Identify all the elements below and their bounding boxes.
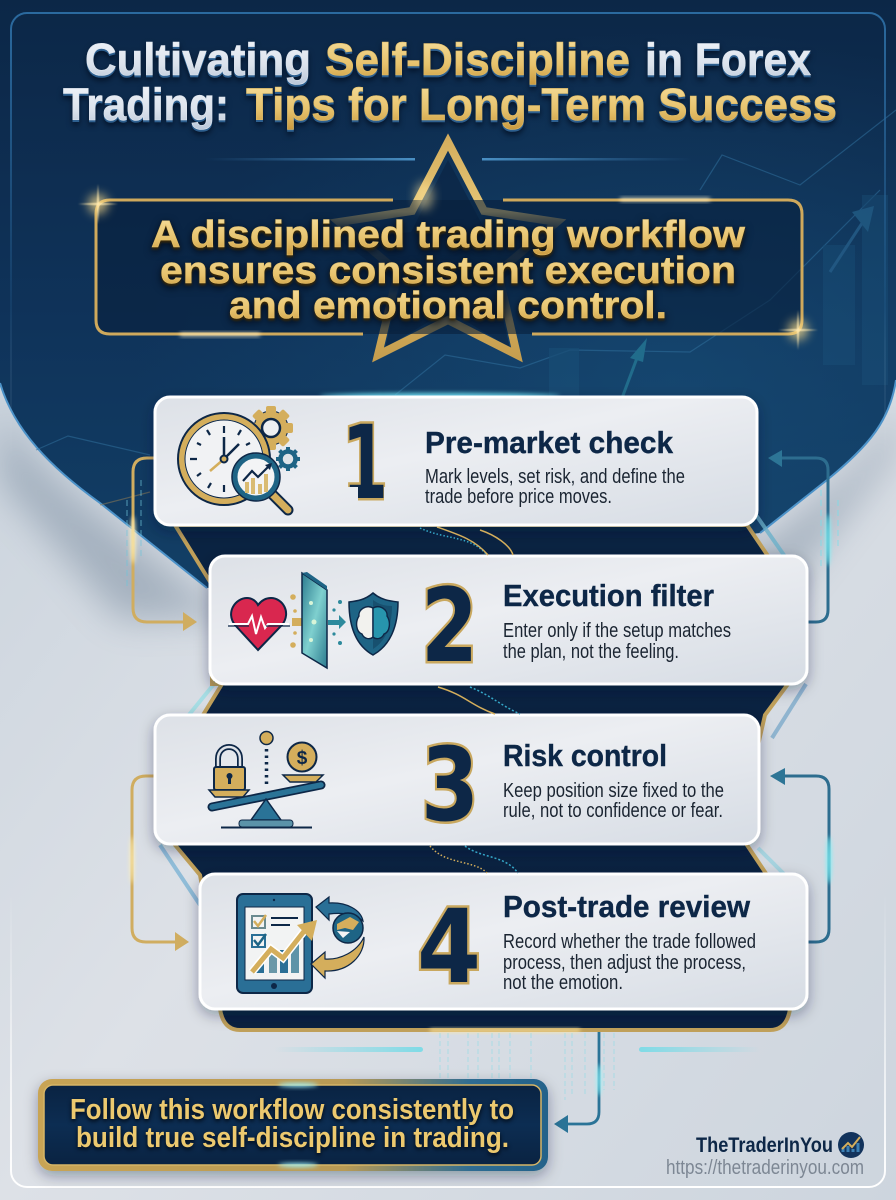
callout: summary box bbox=[38, 1079, 548, 1171]
brand: TheTraderInYou: TheTraderInYou bbox=[696, 1134, 833, 1157]
icon: clock, gears and magnifier bbox=[178, 406, 300, 510]
background market chart bbox=[36, 110, 896, 505]
center hexagonal backdrop bbox=[170, 525, 795, 1030]
heading: execution filter: Execution filter bbox=[503, 578, 714, 613]
star divider lines bbox=[205, 158, 692, 160]
number 3: 3 bbox=[421, 726, 479, 845]
brand: TheTraderInYou bbox=[666, 1132, 864, 1179]
callout: summary box: build true self-discipline in trading. bbox=[76, 1122, 509, 1154]
text: step 2 description: the plan, not the feeling. bbox=[503, 641, 679, 663]
glow under backdrop bbox=[430, 1029, 580, 1032]
title: Self-Discipline bbox=[325, 34, 630, 85]
card 1: pre-market check bbox=[155, 397, 757, 525]
icon: heart, filter and shield bbox=[228, 572, 398, 668]
decorative waves between cards bbox=[420, 527, 520, 873]
arrow: gold loop 3 to 4 bbox=[130, 776, 189, 951]
number 4: 4 bbox=[417, 888, 481, 1007]
text: step 3 description: rule, not to confidence or fear. bbox=[503, 800, 723, 822]
callout: key message box bbox=[78, 182, 818, 350]
light teal diagonal strips bbox=[160, 515, 806, 905]
title: Cultivating bbox=[85, 34, 311, 85]
icon: lock and coin balance bbox=[209, 732, 323, 828]
callout: key message box: ensures consistent execution bbox=[160, 250, 736, 292]
title: in Forex bbox=[645, 34, 811, 85]
callout: key message box: A disciplined trading workflow bbox=[151, 214, 745, 256]
card 3: risk control bbox=[155, 715, 759, 845]
card 4: post-trade review bbox=[200, 874, 807, 1009]
brand: TheTraderInYou: https://thetraderinyou.com bbox=[666, 1157, 864, 1179]
title: Trading: bbox=[63, 79, 229, 130]
callout: key message box: and emotional control. bbox=[229, 285, 667, 327]
data rain bbox=[440, 1033, 614, 1100]
text: step 3 description bbox=[503, 780, 724, 822]
star emblem bbox=[339, 142, 557, 355]
glow above card 1 bbox=[320, 393, 560, 399]
card 2: execution filter bbox=[210, 556, 807, 686]
arrow: gold loop 1 to 2 bbox=[127, 458, 197, 631]
text: step 1 description: trade before price moves. bbox=[425, 486, 612, 508]
text: step 4 description: not the emotion. bbox=[503, 972, 623, 994]
heading: pre-market check: Pre-market check bbox=[425, 425, 674, 460]
arrow: blue loop 2 to 1 bbox=[768, 450, 838, 622]
arrow: blue loop 4 to 3 bbox=[770, 768, 832, 942]
title: Tips for Long-Term Success bbox=[246, 79, 837, 130]
curve shadow bbox=[0, 395, 896, 620]
arrow: down to summary box bbox=[554, 1032, 601, 1133]
cyan light bars bbox=[274, 1047, 760, 1052]
text: step 4 description: process, then adjust the process, bbox=[503, 952, 746, 974]
number 1: 1 bbox=[342, 404, 388, 523]
heading: post-trade review: Post-trade review bbox=[503, 889, 751, 924]
icon: brand logo bbox=[838, 1132, 864, 1158]
number 2: 2 bbox=[421, 567, 478, 686]
callout: summary box: Follow this workflow consistently to bbox=[70, 1094, 514, 1126]
dark header panel bbox=[0, 0, 896, 588]
text: step 4 description bbox=[503, 931, 756, 994]
icon: lock and coin balance: $ bbox=[297, 748, 308, 769]
text: step 1 description: Mark levels, set risk, and define the bbox=[425, 466, 685, 488]
text: step 1 description bbox=[425, 466, 685, 508]
title bbox=[63, 34, 837, 130]
text: step 2 description: Enter only if the setup matches bbox=[503, 620, 731, 642]
icon: tablet report with cycle arrows bbox=[237, 894, 364, 993]
heading: risk control: Risk control bbox=[503, 738, 667, 773]
text: step 2 description bbox=[503, 620, 731, 663]
text: step 4 description: Record whether the trade followed bbox=[503, 931, 756, 953]
text: step 3 description: Keep position size fixed to the bbox=[503, 780, 724, 802]
